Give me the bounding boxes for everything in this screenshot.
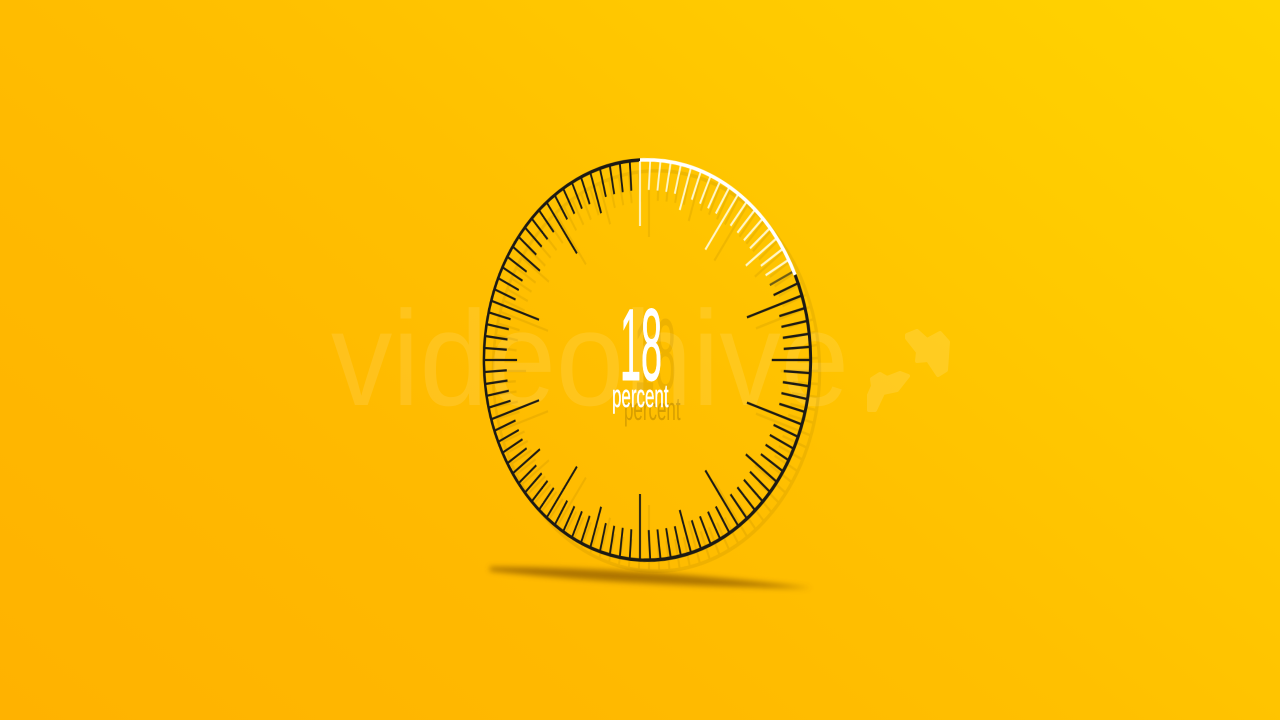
number shadow: 18 — [634, 298, 676, 413]
percent label: percent — [612, 380, 669, 414]
gauge dial — [482, 158, 812, 562]
white progress ticks — [640, 153, 788, 278]
white progress arc — [640, 151, 795, 278]
watermark word: videohive — [331, 283, 849, 434]
percent label shadow: percent — [624, 393, 681, 427]
watermark logo — [869, 331, 948, 410]
number 18: 18 — [620, 288, 662, 403]
dark ticks — [481, 146, 814, 574]
dark arc — [484, 151, 811, 569]
dial shadow — [492, 169, 821, 573]
